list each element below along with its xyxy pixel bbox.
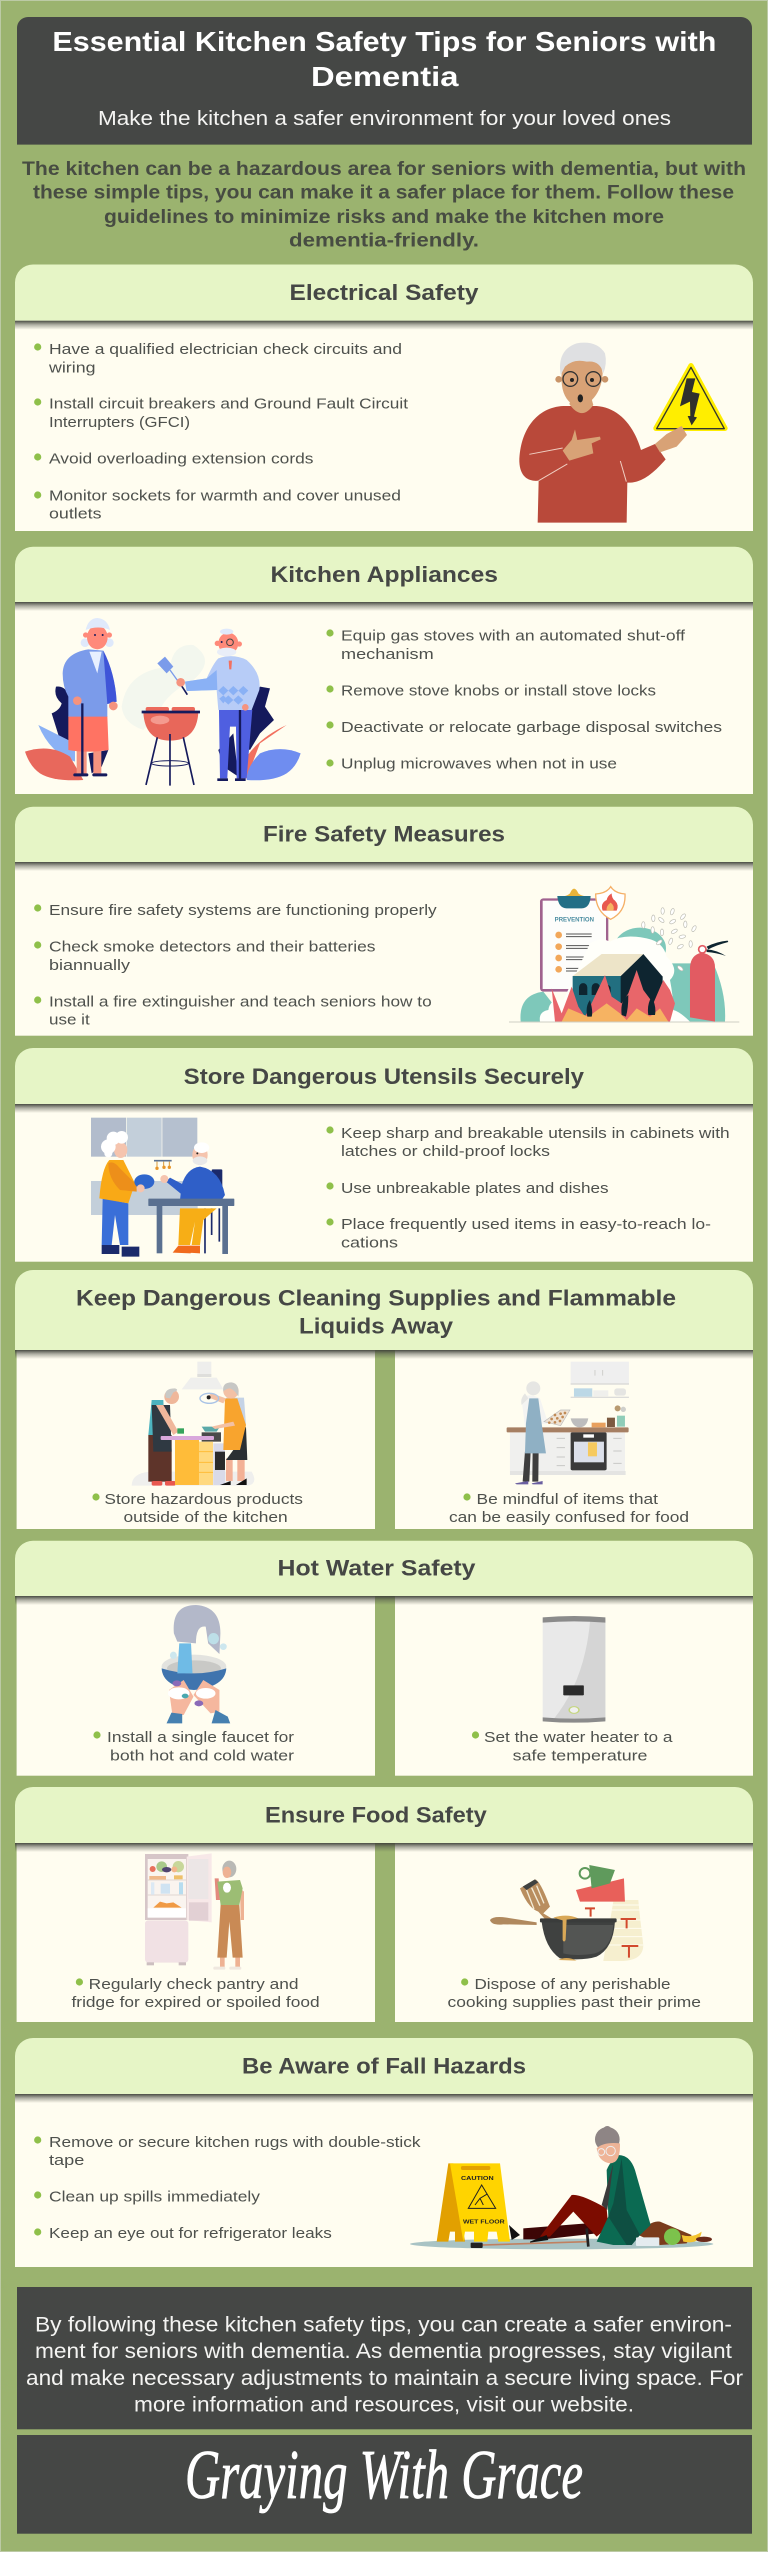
heading: fall hazards: Be Aware of Fall Hazards: [242, 2053, 526, 2078]
bullet list: utensils: Place frequently used items in easy-to-reach lo-: [341, 1216, 711, 1233]
title: Dementia: [311, 61, 459, 92]
panel: be aware of fall hazards: [15, 2038, 753, 2267]
intro text: these simple tips, you can make it a safer place for them. Follow these: [33, 182, 734, 204]
closing message: ment for seniors with dementia. As dementia progresses, stay vigilant: [35, 2340, 732, 2363]
bullet list: fall hazards: tape: [49, 2152, 84, 2169]
bullet list: electrical: Interrupters (GFCI): [49, 414, 190, 431]
bullet: dispose perishable supplies: [448, 1976, 701, 2011]
bullet list: electrical: Monitor sockets for warmth and cover unused: [49, 487, 401, 504]
illustration: couple cooking at a stove: [132, 1362, 629, 1486]
illustration: fire prevention checklist, burning house and extinguisher: [509, 887, 739, 1022]
bullet list: electrical: outlets: [49, 506, 102, 522]
bullet: store hazardous products: [92, 1491, 303, 1526]
bullet list: appliances: Equip gas stoves with an automated shut-off: [341, 628, 686, 644]
bullet: water heater temperature: [472, 1729, 673, 1764]
bullet: check pantry and fridge: fridge for expired or spoiled food: [72, 1994, 320, 2011]
bullet list: appliances: [326, 628, 722, 772]
bullet: dispose perishable supplies: cooking supplies past their prime: [448, 1994, 701, 2011]
heading: kitchen appliances: Kitchen Appliances: [270, 562, 498, 587]
intro text: The kitchen can be a hazardous area for seniors with dementia, but with: [22, 158, 746, 180]
panel: ensure food safety: [15, 1787, 753, 2022]
intro text: dementia-friendly.: [289, 230, 479, 252]
bullet: dispose perishable supplies: Dispose of any perishable: [474, 1976, 670, 1993]
panel: electrical safety: [15, 264, 753, 531]
illustration: pot and stacked dirty dishes: [490, 1865, 643, 1961]
bullet list: fire: use it: [49, 1012, 91, 1028]
heading: cleaning supplies: [76, 1286, 676, 1338]
bullet list: appliances: mechanism: [341, 646, 434, 663]
illustration: senior fallen beside wet floor sign: WET FLOOR: [463, 2219, 505, 2225]
illustration: seniors at a barbecue grill: [25, 618, 301, 786]
bullet list: electrical: Install circuit breakers and Ground Fault Circuit: [49, 396, 409, 412]
bullet list: fire: Install a fire extinguisher and teach seniors how to: [49, 994, 432, 1010]
footer brand: [17, 2435, 752, 2534]
footer brand: Graying With Grace: [185, 2437, 583, 2514]
bullet: single faucet: both hot and cold water: [110, 1748, 294, 1764]
heading: fire safety: Fire Safety Measures: [263, 822, 505, 847]
closing message: and make necessary adjustments to maintain a secure living space. For: [26, 2367, 743, 2390]
bullet list: electrical: [34, 341, 409, 522]
bullet list: utensils: Use unbreakable plates and dishes: [341, 1180, 609, 1197]
closing message: more information and resources, visit our website.: [134, 2394, 634, 2416]
bullet list: utensils: [326, 1125, 730, 1252]
bullet: store hazardous products: outside of the kitchen: [124, 1509, 288, 1526]
heading: cleaning supplies: Liquids Away: [299, 1313, 454, 1338]
bullet: check pantry and fridge: [72, 1976, 320, 2011]
title banner: [17, 17, 752, 145]
bullet: be mindful of items: Be mindful of items that: [476, 1491, 659, 1508]
bullet: single faucet: [93, 1729, 294, 1764]
illustration: washing hands under a faucet: [162, 1605, 230, 1723]
panel: fire safety measures: [15, 807, 753, 1036]
bullet list: fall hazards: Keep an eye out for refrigerator leaks: [49, 2225, 332, 2242]
heading: electrical safety: Electrical Safety: [290, 280, 479, 305]
heading: hot water: Hot Water Safety: [278, 1556, 476, 1581]
heading: cleaning supplies: Keep Dangerous Cleaning Supplies and Flammable: [76, 1286, 676, 1311]
panel: keep dangerous cleaning supplies away: [15, 1270, 753, 1529]
bullet list: utensils: Keep sharp and breakable utensils in cabinets with: [341, 1125, 730, 1142]
bullet: water heater temperature: safe temperature: [513, 1748, 648, 1764]
panel: kitchen appliances: [15, 547, 753, 794]
bullet list: fall hazards: Remove or secure kitchen rugs with double-stick: [49, 2134, 421, 2151]
illustration: seniors in the kitchen at a table: [91, 1118, 234, 1257]
subtitle: Make the kitchen a safer environment for your loved ones: [98, 108, 671, 130]
bullet list: electrical: Have a qualified electrician check circuits and: [49, 341, 402, 358]
bullet list: fall hazards: Clean up spills immediately: [49, 2188, 261, 2206]
heading: food safety: Ensure Food Safety: [265, 1802, 488, 1827]
bullet list: fire: [34, 902, 437, 1028]
heading: utensils: Store Dangerous Utensils Securely: [184, 1064, 585, 1089]
panel: hot water safety: [15, 1541, 753, 1776]
bullet: be mindful of items: can be easily confused for food: [449, 1509, 689, 1526]
bullet: single faucet: Install a single faucet for: [107, 1729, 294, 1746]
illustration: senior fallen beside wet floor sign: [410, 2126, 713, 2249]
bullet list: appliances: Remove stove knobs or install stove locks: [341, 682, 656, 700]
bullet: store hazardous products: Store hazardous products: [104, 1491, 303, 1508]
bullet list: appliances: Deactivate or relocate garbage disposal switches: [341, 719, 722, 736]
panel: store dangerous utensils securely: [15, 1048, 753, 1262]
closing message: By following these kitchen safety tips, you can create a safer environ-: [35, 2314, 732, 2336]
title: Essential Kitchen Safety Tips for Seniors with: [52, 26, 716, 57]
intro text: [22, 158, 746, 252]
illustration: water heater: [543, 1616, 605, 1723]
bullet list: utensils: cations: [341, 1234, 398, 1252]
bullet list: fall hazards: [34, 2134, 421, 2242]
closing message: [17, 2287, 752, 2429]
bullet list: fire: biannually: [49, 957, 131, 974]
bullet list: electrical: wiring: [48, 360, 96, 376]
bullet: water heater temperature: Set the water heater to a: [484, 1729, 673, 1746]
bullet: be mindful of items: [449, 1491, 689, 1526]
title: [52, 26, 716, 92]
bullet list: electrical: Avoid overloading extension cords: [49, 450, 314, 468]
bullet list: fire: Ensure fire safety systems are functioning properly: [49, 902, 437, 919]
bullet list: appliances: Unplug microwaves when not in use: [341, 756, 617, 772]
illustration: senior pointing at electrical hazard sign: [519, 343, 725, 523]
illustration: senior checking an open fridge: [145, 1853, 643, 1970]
bullet: check pantry and fridge: Regularly check pantry and: [89, 1976, 298, 1993]
illustration: senior baking at an oven: [507, 1362, 629, 1484]
bullet list: utensils: latches or child-proof locks: [341, 1143, 550, 1160]
intro text: guidelines to minimize risks and make the kitchen more: [104, 206, 664, 228]
illustration: fire prevention checklist, burning house and extinguisher: PREVENTION: [555, 916, 594, 923]
bullet list: fire: Check smoke detectors and their batteries: [49, 938, 376, 956]
illustration: senior fallen beside wet floor sign: CAUTION: [461, 2176, 494, 2182]
